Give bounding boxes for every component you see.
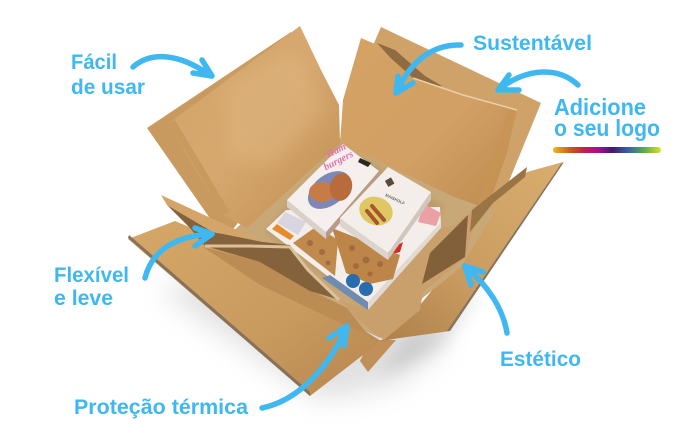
title: aesthetic: Estético [500, 348, 581, 371]
paper sleeve [340, 203, 480, 340]
honeycomb peeking behind right bag [377, 43, 442, 87]
arrow: sustainable [396, 45, 461, 93]
sausage box [340, 167, 431, 260]
back right flap [345, 27, 541, 208]
bag sealed edge [169, 120, 230, 215]
hamburger box [287, 140, 380, 239]
title: thermal protection: Proteção térmica [74, 396, 248, 419]
hamburger title: burgers [322, 149, 355, 173]
pink dessert corner [418, 204, 441, 226]
honeycomb strip top [470, 167, 527, 232]
meal dish [355, 192, 397, 230]
box bottom corner [360, 340, 396, 372]
front right corrugated edge [447, 162, 564, 331]
title: easy to use: de usar [71, 76, 145, 99]
title: sustainable: Sustentável [473, 32, 592, 55]
title: easy to use [71, 51, 145, 99]
lower paper sleeve [203, 247, 381, 341]
pizza toppings [307, 240, 383, 276]
title: flexible and light: e leve [54, 287, 113, 310]
box shadow [160, 260, 480, 400]
cardboard box [128, 27, 564, 396]
hamburger title: Ham [324, 141, 348, 161]
title: easy to use: Fácil [71, 51, 117, 74]
nutrition label [272, 224, 294, 240]
front right flap [381, 162, 563, 341]
pizza label panel [277, 212, 306, 235]
title: add your logo: Adicione [554, 94, 646, 120]
burger plate [301, 163, 357, 217]
arrow: add your logo [498, 72, 578, 90]
pizza box [266, 204, 441, 310]
right paper insulation bag [340, 38, 517, 209]
red logo mark [392, 242, 403, 254]
left paper insulation bag [169, 26, 340, 228]
front left corrugated edge [128, 235, 310, 396]
title: flexible and light: Flexível [54, 264, 129, 287]
hamburger title [318, 140, 355, 173]
paper top flap [161, 195, 263, 242]
front left insulation flap [161, 195, 381, 341]
brand label [358, 158, 371, 167]
arrow: aesthetic [465, 266, 507, 333]
torn paper highlight [205, 246, 339, 300]
logo colour bar [553, 147, 661, 153]
arrow: easy to use [133, 57, 212, 76]
title: add your logo [554, 94, 660, 141]
arrow: flexible [145, 228, 212, 278]
bag light fold [225, 48, 325, 165]
exposed honeycomb right [422, 215, 468, 284]
back left flap [147, 32, 330, 240]
title: flexible and light [54, 264, 129, 310]
food packages [265, 140, 445, 312]
pizza slice right [332, 228, 400, 284]
front right insulation flap [340, 167, 527, 340]
burger patties [309, 182, 335, 202]
bag torn edge highlight [413, 78, 517, 110]
arrow: thermal protection [262, 326, 347, 408]
front left flap [128, 221, 381, 396]
bag right seam [478, 110, 517, 209]
title: add your logo: o seu logo [554, 115, 660, 141]
product name: MAISKOLF [385, 192, 406, 206]
exposed honeycomb [167, 205, 340, 300]
brand crest [385, 177, 394, 187]
pizza slice left [293, 226, 338, 276]
floor shadow around packages [265, 145, 445, 312]
sausages [367, 206, 384, 223]
box floor liner [225, 138, 495, 338]
blue badges [346, 274, 373, 296]
